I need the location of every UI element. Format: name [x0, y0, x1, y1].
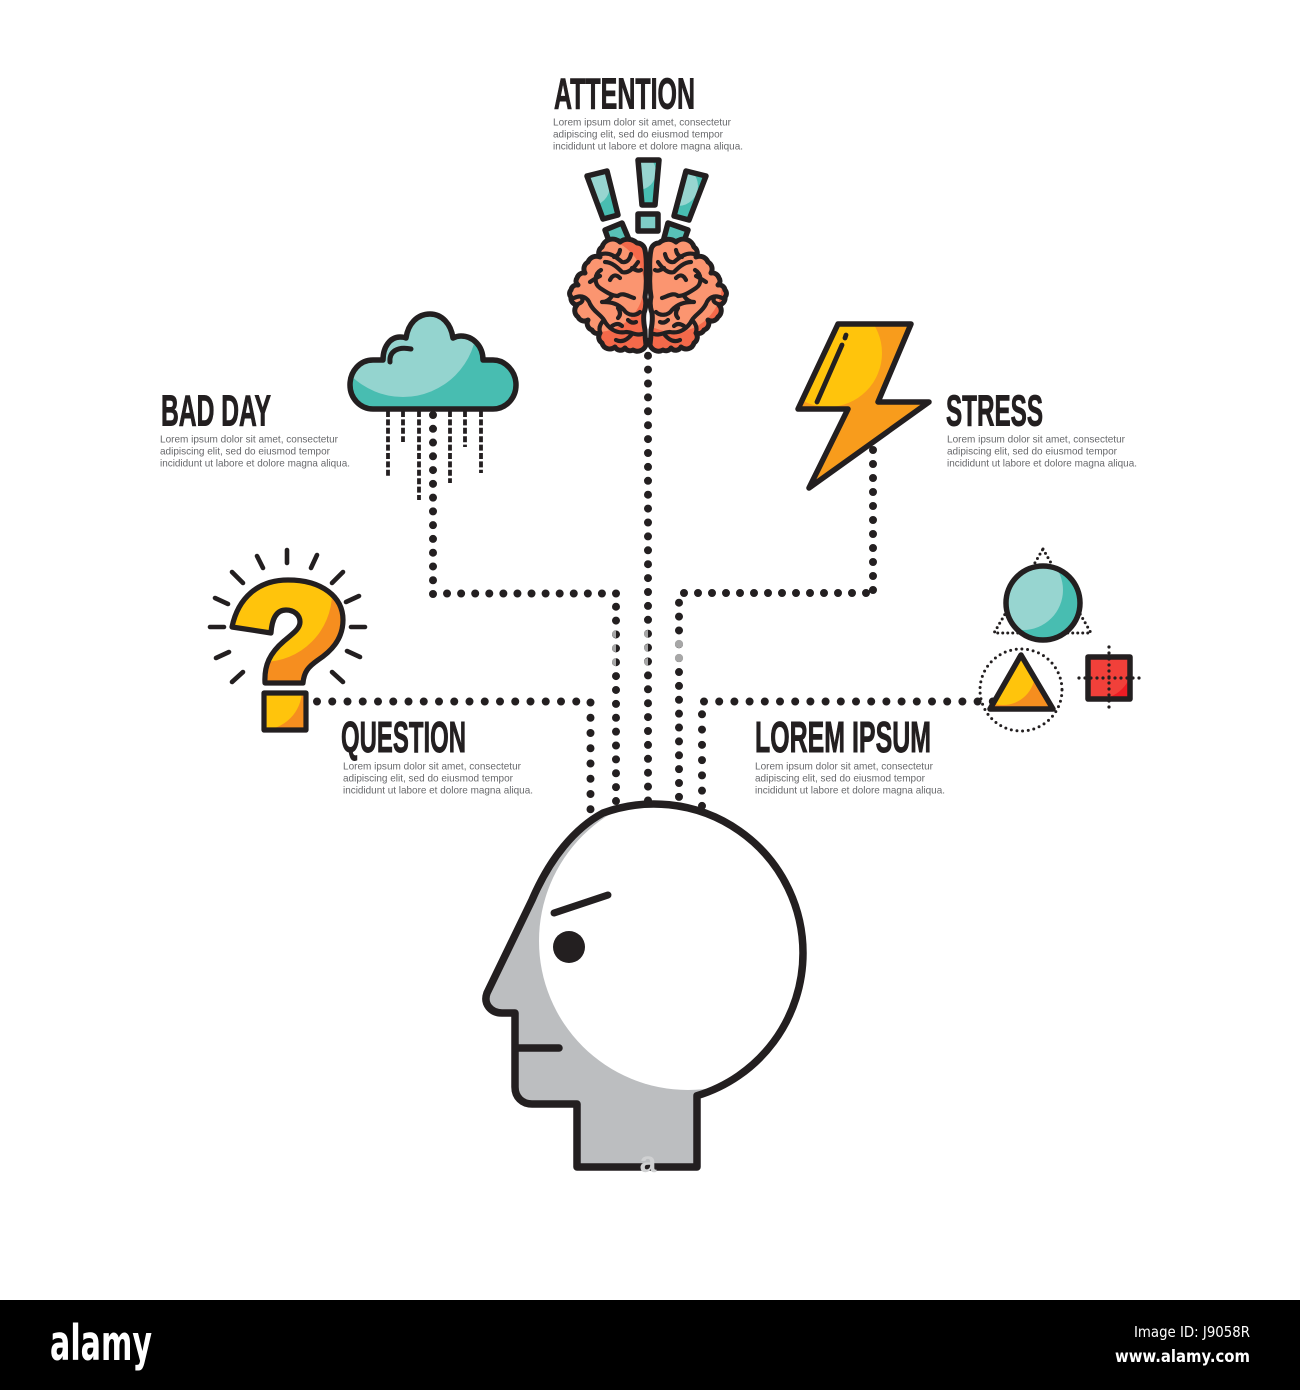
heading: attention: ATTENTION — [554, 70, 695, 118]
panel: question — [208, 548, 532, 796]
text block: attention — [553, 118, 743, 153]
watermark glyph: a — [640, 1146, 657, 1179]
yellow triangle — [987, 652, 1056, 712]
panel: stress — [795, 321, 1136, 491]
dotted crosshair — [1079, 647, 1141, 708]
head profile — [486, 792, 837, 1167]
icon: exclamation marks — [584, 157, 709, 239]
teal circle — [1003, 563, 1083, 643]
red square — [1085, 654, 1133, 702]
text block: lorem ipsum: Lorem ipsum dolor sit amet, consectetur — [755, 762, 934, 773]
text block: bad day: incididunt ut labore et dolore magna aliqua. — [160, 459, 350, 470]
text block: attention: incididunt ut labore et dolore magna aliqua. — [553, 142, 743, 153]
text block: attention: Lorem ipsum dolor sit amet, consectetur — [553, 118, 732, 129]
rain streaks — [388, 411, 481, 500]
connector: lorem ipsum to head — [704, 698, 993, 706]
heading: stress: STRESS — [946, 388, 1043, 436]
text block: stress — [947, 435, 1137, 470]
connector: question to head — [317, 702, 590, 810]
heading: question: QUESTION — [341, 714, 466, 762]
connector: stress to head — [684, 450, 873, 593]
icon: geometric shapes — [971, 549, 1141, 731]
text block: question: incididunt ut labore et dolore magna aliqua. — [343, 786, 533, 797]
icon: rain cloud — [347, 311, 519, 500]
text block: stress: adipiscing elit, sed do eiusmod tempor — [947, 447, 1118, 458]
connector: bad day down — [429, 415, 437, 594]
panel: bad day — [160, 311, 519, 500]
dotted circle guide — [980, 649, 1062, 731]
eyebrow — [554, 895, 608, 913]
heading: lorem ipsum: LOREM IPSUM — [755, 714, 931, 762]
footer url: www.alamy.com — [1115, 1347, 1250, 1367]
connector: bad day across — [433, 590, 616, 598]
text block: attention: adipiscing elit, sed do eiusmod tempor — [553, 130, 724, 141]
brain: right hemisphere — [648, 236, 729, 354]
text block: question — [343, 762, 533, 797]
dotted triangle guide — [994, 549, 1091, 633]
text block: lorem ipsum: adipiscing elit, sed do eiusmod tempor — [755, 774, 926, 785]
text block: bad day: Lorem ipsum dolor sit amet, consectetur — [160, 435, 339, 446]
footer logo: alamy — [50, 1315, 152, 1372]
watermark tint on connector dots — [612, 630, 683, 666]
icon: lightning bolt — [795, 321, 932, 491]
text block: lorem ipsum — [755, 762, 945, 797]
text block: bad day: adipiscing elit, sed do eiusmod tempor — [160, 447, 331, 458]
head outline — [486, 804, 803, 1167]
connector: stress drop to head — [675, 603, 683, 798]
footer bar — [0, 1300, 1300, 1390]
image id: Image ID: J9058R — [1134, 1323, 1250, 1341]
text block: stress: Lorem ipsum dolor sit amet, consectetur — [947, 435, 1126, 446]
mouth — [516, 1044, 559, 1052]
connector: bad day drop to head — [612, 607, 620, 802]
text block: lorem ipsum: incididunt ut labore et dolore magna aliqua. — [755, 786, 945, 797]
connector: lorem ipsum drop to head — [698, 714, 706, 806]
eye — [553, 931, 585, 963]
text block: question: Lorem ipsum dolor sit amet, consectetur — [343, 762, 522, 773]
head fill — [486, 804, 803, 1167]
white head highlight — [539, 808, 800, 1090]
panel: lorem ipsum — [755, 549, 1141, 797]
heading: bad day: BAD DAY — [161, 388, 271, 436]
text block: bad day — [160, 435, 350, 470]
icon: brain — [550, 236, 726, 351]
text block: stress: incididunt ut labore et dolore magna aliqua. — [947, 459, 1137, 470]
connector: attention to head — [644, 342, 652, 801]
icon: question mark — [208, 548, 368, 733]
panel: attention — [550, 70, 743, 351]
rays — [210, 550, 365, 682]
brain: left hemisphere — [567, 236, 648, 354]
text block: question: adipiscing elit, sed do eiusmod tempor — [343, 774, 514, 785]
dotted connectors — [317, 342, 993, 810]
